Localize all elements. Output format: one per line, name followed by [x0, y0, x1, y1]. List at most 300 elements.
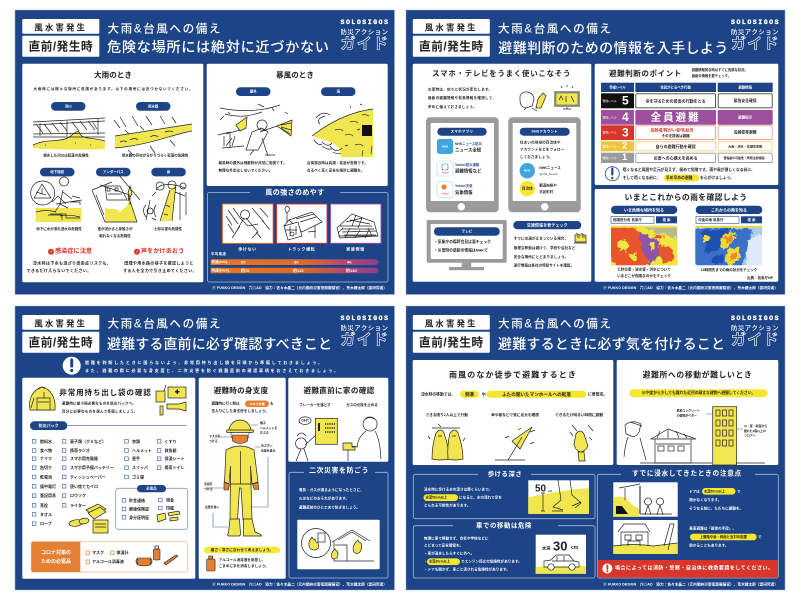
sns text: しておきましょう。 — [520, 154, 553, 159]
tv tips — [434, 239, 491, 252]
vertical evacuation text — [689, 526, 762, 548]
heading: secondary disaster: 二次災害を防ごう — [309, 466, 369, 474]
callouts: building labels: 川・崖・斜面から — [744, 423, 767, 428]
callouts: clothing labels: 長袖を着る — [261, 448, 276, 452]
map captions: 出典：気象庁HP — [747, 275, 774, 280]
label: outdoors — [236, 87, 270, 96]
app: Yahoo disaster: Yahoo!防災速報 — [455, 162, 480, 167]
bag intro: 避難時に最小限必要なものを防災パックへ。 — [62, 401, 136, 406]
callouts: building labels — [677, 407, 767, 438]
box: covid essentials: アルコール消毒液 — [92, 558, 124, 564]
app: NHK news: NHKニュース防災 — [455, 141, 482, 146]
device: smartphone apps — [426, 117, 499, 212]
label: dangerous places now — [611, 206, 677, 214]
icons: towels, slippers, notebook — [69, 504, 108, 533]
callouts: clothing labels: 長靴を履く — [205, 504, 220, 509]
illustration: switching off breaker: OFF! — [301, 419, 309, 423]
search box: left: 検 索 — [663, 217, 671, 222]
highlight: go to sturdy building: 川や崖から少しでも離れた近所の頑丈な建物へ避難してください。 — [642, 390, 755, 395]
level 4: 避難指示 — [738, 114, 753, 119]
legend: average wind speed: 平均風速 — [211, 251, 226, 256]
transport text: 安全な場所にとどまりましょう。 — [514, 254, 568, 259]
panel: walkable depth — [413, 469, 595, 519]
checklist: disaster pack: スマホ用予備バッテリー — [70, 464, 114, 470]
checklist: disaster pack: 乾電池 — [40, 474, 52, 480]
checklist: disaster pack: 軍手 — [132, 455, 140, 461]
vertical evacuation text: 垂直避難は「最後の手段」。 — [689, 526, 736, 531]
car text: とどまって安全確保を。 — [424, 543, 463, 548]
caption: underpass danger — [98, 226, 133, 238]
header: panel 1: 直前/発生時 — [28, 40, 93, 54]
credit line: Ⓕ FUKKO DESIGN 六◎AD 協力：佐々木晶二（元内閣府災害復興審議官）、荒木健太郎（雲研究者） — [603, 285, 778, 290]
transport text: 運行情報は各社の特設サイトを確認。 — [514, 262, 574, 267]
depth text: になると、水の流れで足を — [459, 495, 502, 500]
label: transport info: 交通情報を要チェック — [527, 223, 568, 228]
callouts: building labels: 離れた2階以上の — [744, 428, 766, 433]
callouts: building labels: の建物がベター — [677, 412, 697, 417]
illustration: flooded channel — [114, 116, 192, 155]
secondary disaster text: 火災などのおそれがあります。 — [299, 496, 349, 501]
depth text: 水深50cm以上 — [426, 495, 448, 500]
checklist: disaster pack: 救急箱 — [164, 447, 176, 453]
caption: sea danger: なるべく高く安全な場所に避難を。 — [307, 168, 365, 173]
checklist: disaster pack: 食べ物 — [40, 447, 52, 453]
header: panel 3: 大雨&台風への備え — [108, 316, 220, 330]
bar: wind speed m/s: 20 — [241, 260, 246, 265]
level 3: 高齢者/障がい者/乳幼児 — [650, 126, 694, 132]
checklist: disaster pack: 筆記用具 — [40, 492, 56, 498]
header: panel 2: 直前/発生時 — [419, 40, 484, 54]
level 2: 自らの避難行動を確認 — [656, 143, 696, 149]
box: essentials: 健康保険証 — [129, 506, 149, 512]
illustration: underpass with car — [92, 174, 140, 222]
bar: wind speed m/s — [211, 259, 379, 265]
panel: check your home — [288, 378, 388, 462]
header: panel 1 — [22, 19, 388, 57]
heading: strong wind: 暴風のとき — [276, 70, 314, 80]
checklist: disaster pack: ロープ — [40, 520, 52, 526]
intro text: また、避難の際に必要な身支度と、二次災害を防ぐ避難直前の確認事項をおさえておきましょう。 — [85, 367, 338, 373]
panel: check before evacuating — [15, 306, 394, 590]
warning note: 暗くなると周囲や足元が見えず、極めて危険です。雨や風が激しくなる前に、 — [623, 167, 755, 172]
card: house collapse — [330, 204, 381, 243]
header: panel 3: 防災アクション — [340, 323, 388, 332]
note: 避難情報発令時はすでに危険な状況。 — [692, 67, 748, 72]
header: panel 4: 直前/発生時 — [419, 336, 484, 350]
level 5: 命を守るための最善の行動をとる — [646, 97, 706, 103]
sns text — [520, 139, 565, 159]
level 2: 2 — [622, 140, 627, 152]
checklist: disaster pack: タオル — [40, 511, 52, 517]
checklist: disaster pack: 懐中電灯 — [40, 483, 56, 489]
box: essentials — [116, 485, 188, 529]
header: panel 3: ガイド — [340, 332, 388, 348]
illustration: underground flooding — [31, 177, 82, 222]
car text: 無理に車で移動せず、会社や学校などに — [424, 536, 489, 541]
icon: person with phone — [520, 92, 546, 111]
map: rain forecast — [695, 226, 762, 266]
header: panel 1: 風水害発生 — [34, 23, 87, 33]
caption: breaker: ブレーカーを落とす — [299, 402, 331, 407]
callouts: clothing labels: 長ズボン — [261, 443, 273, 448]
label: house: 家屋倒壊 — [346, 246, 365, 252]
transport text: 無理な移動は避けて、学校や会社など — [514, 245, 576, 250]
label: apps: スマホアプリ — [451, 129, 473, 134]
label: underpass: アンダーパス — [103, 169, 124, 174]
account: local government: 都道府県や — [539, 183, 557, 188]
checklist: disaster pack: ティッシュペーパー — [70, 474, 106, 480]
checklist: disaster pack: ライター — [70, 502, 86, 508]
caption: outdoors danger: 無理な外出はしないでください。 — [218, 168, 272, 173]
map captions: 土砂災害・浸水害・洪水について — [617, 266, 671, 271]
heading: wind strength: 風の強さのめやす — [265, 188, 325, 196]
table header: 避難情報 — [738, 84, 753, 89]
box: covid essentials: 体温計 — [116, 549, 128, 555]
panel: preparation for evacuating — [199, 378, 286, 579]
label: underground — [40, 168, 74, 176]
header: panel 2: 大雨&台風への備え — [498, 22, 611, 36]
card: cannot walk — [222, 204, 273, 243]
caption: outdoors danger — [218, 160, 287, 173]
heading: car danger: 車での移動は危険 — [476, 520, 532, 530]
highlight: dress for the weather: 暑さ・寒さに合わせて考えましょう。 — [211, 547, 273, 552]
table: alert levels — [601, 83, 773, 163]
header: panel 3: SOLOSIGOS — [340, 315, 388, 322]
door text: そうなる前に、ただちに避難を。 — [689, 506, 743, 511]
bar: wind speed m/s: 秒速(m/s)... — [212, 259, 230, 264]
heading: heavy rain: 大雨のとき — [94, 70, 132, 80]
intro text: 避難を判断したときに困らないよう、非常用持ち出し袋を日頃から準備しておきましょう。 — [85, 359, 322, 365]
app: Yahoo disaster: Yahoo! — [441, 172, 449, 174]
secondary disaster text — [299, 487, 364, 509]
header: panel 1: 大雨&台風への備え — [108, 22, 220, 36]
icon: backpack — [30, 387, 55, 410]
app: Yahoo weather: 気象情報 — [455, 189, 473, 196]
panel: heavy rain — [22, 64, 203, 282]
header: panel 2: SOLOSIGOS — [731, 19, 779, 26]
app: Yahoo weather: Yahoo! — [441, 192, 449, 196]
icon: tv with emergency broadcast — [554, 85, 580, 109]
device: sns accounts — [508, 117, 581, 212]
label: truck: トラック横転 — [288, 246, 315, 252]
car text: でエンジン停止の危険性があります。 — [461, 559, 522, 564]
label: outdoors: 屋外 — [250, 89, 257, 94]
header: panel 1: 防災アクション — [340, 27, 388, 36]
illustration: high waves — [312, 104, 373, 157]
intro text: 早めに備えておきましょう。 — [428, 104, 477, 109]
header: panel 1: ガイド — [340, 36, 388, 52]
search box: right — [696, 216, 762, 223]
caption: check footing: 傘や棒などで常に足元を確認 — [491, 412, 539, 417]
header: panel 3: 風水害発生 — [34, 319, 87, 329]
bar: wind speed km/h: 約140 — [346, 267, 357, 273]
preparation text: 避難時に行く際は — [212, 401, 240, 406]
preparation text: コロナ対策 — [249, 401, 266, 406]
panel: heavy rain and wind, dangerous places — [15, 10, 394, 294]
illustration: 30cm car: 30 — [553, 538, 567, 554]
credit line: Ⓕ FUKKO DESIGN 六◎AD 協力：佐々木晶二（元内閣府災害復興審議官）、荒木健太郎（雲研究者） — [212, 285, 387, 290]
bar: wind speed m/s: 30 — [294, 260, 299, 265]
app: NHK news: NHK — [442, 144, 449, 148]
warning sentence: 側溝 — [465, 391, 474, 397]
checklist: disaster pack: ナイフ — [40, 455, 52, 461]
checklist: disaster pack: くすり — [164, 438, 176, 444]
panel: already flooded — [597, 468, 778, 578]
card: truck overturned — [276, 204, 327, 243]
caption: channel danger: 用水路の存在が分かりづらく転落の危険性 — [122, 152, 189, 158]
level 4: 4 — [622, 110, 629, 124]
caption: landslide danger: 土砂災害の危険性 — [154, 226, 182, 231]
sanitizer text — [219, 557, 269, 568]
callouts: clothing labels — [204, 420, 277, 527]
caption: outdoors danger: 暴風時の屋外は飛散物が非常に危険です。 — [218, 160, 287, 165]
checklist: disaster pack: 飲料水 — [40, 438, 52, 444]
car text: ・ — [424, 560, 428, 564]
checklist: disaster pack: 携帯ラジオ — [70, 447, 90, 453]
bag intro: 自分に必要なものを選んで準備しましょう。 — [62, 409, 138, 414]
checklist: disaster pack: ロウソク — [70, 492, 86, 498]
icon: exclamation — [63, 357, 81, 375]
label: sns: SNSアカウント — [532, 129, 558, 134]
checklist: disaster pack — [32, 438, 184, 526]
car text: 水深30cm以上 — [429, 559, 451, 564]
heading: preparation: 避難時の身支度 — [214, 385, 268, 395]
warning note: 早め早めの避難 — [666, 175, 693, 180]
box: covid essentials — [31, 542, 188, 572]
level 1: 災害への心構えを高める — [654, 154, 698, 160]
note: 最新の情報を要チェック。 — [692, 73, 731, 78]
illustration: house — [640, 429, 712, 463]
label: underpass — [96, 168, 130, 176]
icon: sanitizer bottle — [207, 556, 215, 571]
preparation text: 念入りにした身支度をしましょう。 — [212, 408, 269, 413]
warning note — [623, 167, 755, 182]
account: NHK news: NHKニュース — [539, 165, 561, 170]
level 2 — [601, 140, 772, 152]
checklist: disaster pack: 缶切り — [40, 464, 52, 470]
illustration: flooded river — [33, 118, 105, 150]
secondary disaster text: 避難直前のひと工夫で防ぎましょう。 — [299, 504, 360, 509]
label: river — [51, 102, 86, 111]
app: Yahoo weather — [437, 182, 473, 198]
heading: home check: 避難直前に家の確認 — [303, 385, 375, 395]
warning sentence: 浸水時の移動では、 — [421, 391, 455, 396]
level 1: 警報級の可能性（早期注意情報） — [724, 155, 767, 160]
callout: infection warning: できるだけ入らないでください。 — [26, 267, 92, 273]
bar: wind speed m/s: 40 — [347, 260, 352, 265]
heading: use phones and tv: スマホ・テレビをうまく使いこなそう — [432, 69, 571, 78]
transport text: すでに交通が止まっている場合、 — [514, 236, 568, 241]
search box: right: 検 索 — [748, 217, 756, 222]
panel: evacuation decision points — [595, 64, 778, 185]
illustration: 50cm water depth: cm — [548, 489, 553, 493]
table header: 住民がとるべき行動 — [660, 84, 691, 89]
highlight: go to sturdy building — [629, 389, 768, 397]
header: panel 3: 直前/発生時 — [28, 336, 93, 350]
search box: left — [611, 216, 677, 223]
credit line: Ⓕ FUKKO DESIGN 六◎AD 協力：佐々木晶二（元内閣府災害復興審議官）、荒木健太郎（雲研究者） — [212, 582, 387, 586]
caption: sea danger: 台風接近時は高潮・高波が危険です。 — [307, 160, 368, 165]
table header: 警戒レベル — [610, 84, 626, 89]
transport text — [514, 236, 576, 267]
level 4: 警戒レベル — [602, 115, 617, 119]
callout: infection warning: ! — [50, 249, 52, 254]
checklist: disaster pack: 使い捨てカイロ — [70, 483, 98, 489]
checklist: disaster pack: 耳栓 — [40, 502, 48, 508]
app: NHK news — [437, 139, 482, 154]
credit line: Ⓕ FUKKO DESIGN 六◎AD 協力：佐々木晶二（元内閣府災害復興審議官）、荒木健太郎（雲研究者） — [603, 582, 778, 586]
label: sea: 海 — [336, 89, 340, 94]
label: cliff — [151, 168, 186, 176]
label: transport info — [513, 221, 581, 229]
sns text: 住まいの地域の自治体や — [520, 139, 561, 144]
callout: infection warning: 浸水時は下水も混ざり感染症リスクも、 — [33, 260, 111, 266]
door text: で — [737, 489, 741, 493]
account: local government — [520, 181, 557, 196]
illustration: 30cm car: cm — [571, 545, 579, 551]
bar: wind speed km/h: 時速(km/h).. — [212, 268, 231, 272]
intro text — [428, 86, 496, 109]
panel: obtaining information — [406, 10, 785, 294]
caption: daylight: できるだけ明るい時間に避難 — [555, 412, 603, 417]
illustration: sturdy concrete building — [713, 407, 765, 465]
label: tv: テレビ — [462, 228, 473, 234]
preparation text — [212, 400, 274, 413]
warning sentence: に要警戒。 — [588, 391, 607, 396]
panel: strong wind — [207, 64, 388, 186]
level 3: 警戒レベル — [602, 131, 617, 135]
warning note: そして暗くなる前に、 — [623, 175, 660, 180]
label: river: 河川 — [65, 103, 72, 108]
map: danger distribution — [611, 226, 678, 266]
depth text — [424, 486, 502, 507]
depth text: 浸水時に歩ける水の深さは膝くらいまで。 — [424, 486, 492, 491]
illustration: turning off gas — [343, 417, 381, 461]
label: underground: 地下施設 — [50, 169, 65, 174]
bar: wind speed km/h: 約110 — [293, 267, 304, 273]
header: panel 2: 風水害発生 — [425, 23, 478, 33]
callout: stop others: する人を全力で引き止めてください。 — [123, 267, 197, 273]
checklist: disaster pack: ヘルメット — [132, 448, 152, 453]
map captions: 15時間先までの雨の状況をチェック — [701, 267, 758, 272]
illustration: house with cliff — [613, 520, 678, 554]
callouts: clothing labels: つける — [209, 438, 218, 443]
panel: wind strength guide — [208, 188, 388, 282]
box: covid essentials: マスク — [92, 549, 104, 555]
caption: sea danger — [307, 160, 368, 173]
callouts: clothing labels: かぶる — [260, 430, 269, 435]
heading: walking evacuation: 雨風のなか徒歩で避難するとき — [449, 370, 577, 380]
callouts: clothing labels: ヘルメットを — [260, 425, 277, 430]
caption: underpass danger: 取れなくなる危険性 — [99, 233, 131, 238]
level 3: その支援者は避難 — [662, 133, 690, 138]
account: NHK news: @nhk_bousai — [539, 172, 558, 176]
caption: river danger: 増水した河川は転落の危険性 — [43, 152, 89, 158]
header: panel 4 — [413, 315, 779, 353]
box: essentials: 現金 — [166, 496, 174, 502]
callouts: clothing labels: 手袋を — [204, 481, 213, 486]
checklist: disaster pack: 保温シート — [164, 455, 184, 461]
box: essentials: 印鑑 — [166, 504, 174, 510]
sns text: アカウントなどをフォロー — [520, 147, 565, 152]
header: panel 4: ガイド — [731, 332, 778, 348]
label: disaster pack: 防災パック — [39, 422, 59, 428]
checklist: disaster pack: スリッパ — [132, 464, 148, 470]
level 1: 警戒レベル — [602, 156, 617, 160]
callouts: building labels: 鉄筋コンクリート — [677, 407, 700, 412]
level 5: 警戒レベル — [602, 99, 617, 103]
warning sentence — [421, 391, 607, 398]
callouts: clothing labels: つける — [204, 486, 213, 491]
banner: request rescue — [598, 560, 778, 578]
illustration: rain gear figure — [224, 420, 262, 536]
panel: emergency bag — [22, 378, 195, 579]
caption: travel in pairs: できる限り2人以上で行動 — [425, 412, 468, 417]
level 3 — [601, 125, 772, 140]
box: essentials: 貯金通帳 — [129, 497, 145, 503]
level 2: 警戒レベル — [602, 144, 617, 148]
header: panel 1: SOLOSIGOS — [340, 19, 388, 26]
label: irrigation channel: 用水路 — [148, 103, 159, 108]
header: panel 4: SOLOSIGOS — [731, 315, 779, 322]
car text: ・車が浸水したらすぐに外へ。 — [424, 550, 474, 555]
heading: walkable depth: 歩ける深さ — [488, 469, 522, 478]
caption: gas valve: ガスの元栓を止める — [346, 402, 378, 407]
search box: right: 今後の雨 気象庁 — [698, 217, 724, 222]
warning sentence: や — [482, 391, 486, 398]
heading: rain check: いまとこれからの雨を確認しよう — [625, 192, 747, 202]
car text: ・ドアも開かず、車ごと流される危険性があります。 — [424, 566, 510, 571]
warning sentence: ふたの開いたマンホールへの転落 — [502, 391, 571, 398]
header: panel 2: ガイド — [731, 36, 778, 52]
heading: emergency bag: 非常用持ち出し袋の確認 — [59, 387, 151, 397]
label: dangerous places now: いま危険な場所を知る — [624, 206, 664, 212]
heading: decision points: 避難判断のポイント — [609, 68, 682, 78]
panel: precautions during evacuation — [406, 306, 785, 590]
preparation text: も — [270, 401, 274, 406]
account: NHK news — [520, 163, 561, 178]
header: panel 2: 防災アクション — [731, 27, 778, 36]
callout: infection warning: 感染症に注意 — [55, 247, 93, 255]
illustration: person walking in rain — [570, 425, 593, 461]
header: panel 2 — [413, 19, 779, 57]
sanitizer text: こまめに手を消毒しましょう。 — [219, 563, 269, 568]
search box: left: 危険度分布 気象庁 — [613, 217, 642, 222]
level 4: 全員避難 — [651, 110, 701, 123]
app: Yahoo disaster — [437, 161, 482, 176]
illustration: door under water pressure — [613, 482, 678, 517]
tv tips: ・気象庁の臨時会見は要チェック — [434, 239, 491, 244]
highlight: dress for the weather — [204, 547, 280, 553]
level 4 — [601, 110, 773, 125]
header: panel 3: 避難する直前に必ず確認すべきこと — [107, 336, 332, 352]
level 2: 大雨・洪水・高潮注意報 — [728, 143, 763, 148]
callouts: clothing labels: マスクを — [209, 433, 221, 438]
checklist: disaster pack: ゴミ袋 — [132, 474, 144, 480]
door text: 水深50cm以上 — [704, 488, 726, 493]
map captions: いまどこが危険なのかをチェック — [617, 273, 671, 278]
heading: difficult movement: 避難所への移動が難しいとき — [643, 370, 752, 380]
vertical evacuation text: で — [758, 535, 762, 539]
note — [692, 67, 748, 78]
checklist: disaster pack: 菓子類（グミなど） — [70, 438, 106, 444]
illustration: 30cm car: 水深 — [542, 544, 551, 552]
intro text: 最新の避難情報や気象情報を確認して、 — [428, 95, 496, 100]
illustration: house fire — [297, 520, 380, 569]
device: television — [427, 220, 507, 270]
car text — [424, 536, 522, 571]
checklist: disaster pack: スマホ用充電器 — [70, 455, 98, 461]
